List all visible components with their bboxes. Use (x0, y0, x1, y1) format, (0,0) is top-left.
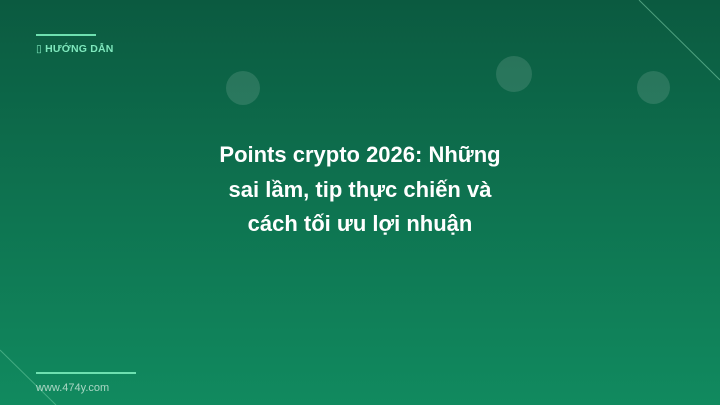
decorative circle middle (496, 56, 532, 92)
footer website: www.474y.com (36, 382, 109, 394)
title: sai lầm, tip thực chiến và (229, 176, 491, 202)
decorative circle right (637, 71, 670, 104)
title (219, 142, 501, 236)
title: Points crypto 2026: Những (219, 142, 501, 167)
title: cách tối ưu lợi nhuận (248, 211, 472, 236)
decorative circle left (226, 71, 260, 105)
category label: ▯ HƯỚNG DẪN (36, 43, 114, 55)
